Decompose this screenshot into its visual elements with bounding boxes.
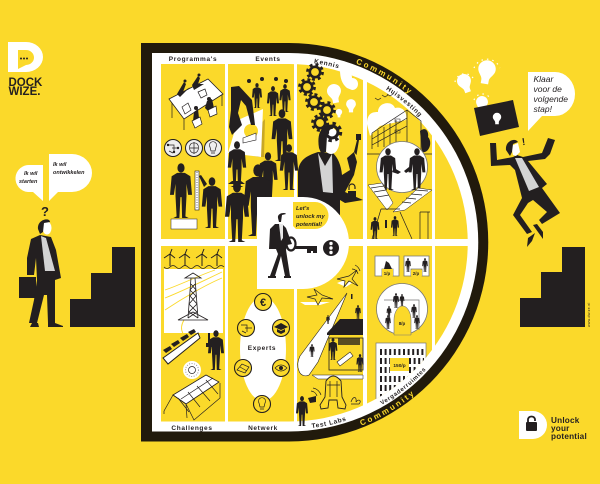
illustration: lab building: [327, 319, 364, 372]
panel: huisvesting: [367, 94, 432, 239]
shape: white ellipse: [240, 297, 286, 401]
label: Kennis: Kennis: [314, 58, 339, 68]
panel: test labs: [296, 265, 364, 426]
logo: unlock your potential: [519, 411, 587, 441]
illustration: room 150 persons: [376, 343, 426, 403]
illustration: wind turbine blade: [298, 293, 361, 376]
icon: keyhole dots: [323, 240, 339, 256]
panel: center white D with key: [257, 197, 349, 289]
big D frame: [141, 43, 488, 442]
speech bubble: Klaar voor de volgende stap: Klaar: [534, 74, 555, 84]
label: Experts: Experts: [248, 345, 276, 352]
illustration: handshake circle: [376, 142, 428, 192]
icon: handshake: [234, 360, 252, 376]
speech bubble: Klaar voor de volgende stap: voor de: [534, 84, 562, 94]
icon: eye: [272, 360, 290, 376]
figure: man with briefcase: [19, 219, 63, 327]
figure: jumping man: [490, 138, 560, 247]
icons: wind turbines: [164, 249, 224, 268]
cloud: [367, 103, 406, 136]
logo: Dock Wize: WIZE.: [8, 86, 40, 98]
speech bubble: Let's unlock my potential: potential!: [295, 222, 322, 228]
figure: thinker with key and lock: [298, 123, 363, 215]
panel: kennis: [298, 64, 363, 215]
illustration: room 2 persons: [404, 256, 429, 276]
illustration: room 1 person: [375, 256, 399, 276]
illustration: room 150 persons: 150/p: [393, 363, 406, 369]
panel: challenges: [163, 249, 224, 420]
speech bubble: Ik wil ontwikkelen: [49, 154, 92, 201]
panel: events: [225, 77, 298, 242]
logo: unlock your potential: potential: [551, 432, 587, 441]
icon: graduation cap: [272, 320, 290, 336]
label: Test Labs: Test Labs: [311, 418, 346, 428]
figure: man with hammer: [206, 330, 224, 370]
label: Challenges: Challenges: [171, 425, 213, 432]
illustration: building: [367, 110, 432, 154]
illustration: room 8 persons: 8/p: [399, 321, 405, 326]
icon: key: [286, 238, 317, 253]
label: Programma's: Programma's: [169, 56, 217, 63]
logo: unlock your potential: your: [551, 424, 570, 433]
icon: bulb: [254, 396, 270, 412]
speech bubble: Ik wil ontwikkelen: ontwikkelen: [53, 170, 85, 176]
illustration: meeting table: [169, 74, 223, 130]
icon: light bulb: [204, 140, 222, 156]
speech bubble: Let's unlock my potential: unlock my: [296, 214, 325, 220]
label: Netwerk: Netwerk: [248, 425, 278, 432]
yellow columns: [161, 64, 495, 422]
label: Community top: Community: [356, 59, 412, 94]
speech bubble: Klaar voor de volgende stap: [528, 72, 575, 131]
speech bubble: Klaar voor de volgende stap: volgende: [534, 94, 568, 104]
figure: man holding key: [268, 213, 292, 278]
illustration: printed sheet: [228, 109, 265, 157]
illustration: robot arm: [229, 86, 255, 135]
icon: ruler: [195, 171, 199, 210]
figure: man measuring: [199, 175, 222, 228]
big D white inner: [152, 53, 478, 432]
illustration: power pylon: [164, 269, 223, 340]
event attendees: [225, 77, 298, 242]
label: Events: Events: [255, 56, 281, 63]
figure: man with remote: [296, 396, 316, 426]
label: Community bottom: Community: [360, 391, 414, 425]
label: Vergaderruimtes: Vergaderruimtes: [380, 368, 426, 404]
logo: Dock Wize: DOCK: [8, 77, 43, 89]
stairs: right: [520, 247, 585, 327]
panel: vergaderruimtes: [375, 256, 429, 403]
question mark: ?: [41, 204, 49, 219]
clouds: [340, 69, 358, 90]
illustration: robot: [312, 375, 363, 409]
icon: brain: [186, 140, 202, 156]
panel: netwerk: [234, 294, 290, 412]
stairs: left: [70, 247, 135, 327]
illustration: room 1 person: 1/p: [384, 271, 390, 276]
panel: programma's: [164, 74, 223, 229]
icons: floating bulbs: [455, 59, 500, 113]
speech bubble: Ik wil starten: [15, 165, 43, 201]
logo: unlock your potential: Unlock: [551, 416, 580, 425]
label: Huisvesting: Huisvesting: [386, 86, 422, 117]
illustration: room 8 persons: [376, 284, 428, 340]
icon: laptop: [474, 100, 519, 136]
exclamation mark: !: [521, 137, 526, 148]
illustration: conveyor belt: [163, 329, 200, 364]
logo: Dock Wize: [8, 42, 43, 98]
figure: man on box: [170, 163, 197, 229]
icons: light bulbs: [326, 83, 356, 117]
speech bubble: Let's unlock my potential: Let's: [296, 206, 310, 212]
illustration: hallway with skylights: [368, 183, 432, 239]
illustration: room 2 persons: 2/p: [413, 271, 419, 276]
illustration: greenhouse: [164, 375, 220, 420]
website text: www.dwize.nl: [587, 302, 591, 327]
speech bubble: Klaar voor de volgende stap: stap!: [534, 104, 553, 114]
icon: euro: €: [260, 297, 266, 309]
icon: network circuit: [164, 140, 182, 156]
icon: circuit: [238, 320, 254, 336]
speech bubble: Ik wil starten: Ik wil: [24, 171, 38, 177]
speech bubble: Ik wil starten: starten: [19, 179, 38, 185]
speech bubble: Let's unlock my potential: [293, 202, 328, 229]
icons: birds: [375, 94, 393, 100]
icons: drones: [300, 265, 360, 305]
speech bubble: Ik wil ontwikkelen: Ik wil: [53, 162, 67, 168]
icons: gears: [299, 64, 335, 131]
icon: sun: [183, 361, 201, 379]
